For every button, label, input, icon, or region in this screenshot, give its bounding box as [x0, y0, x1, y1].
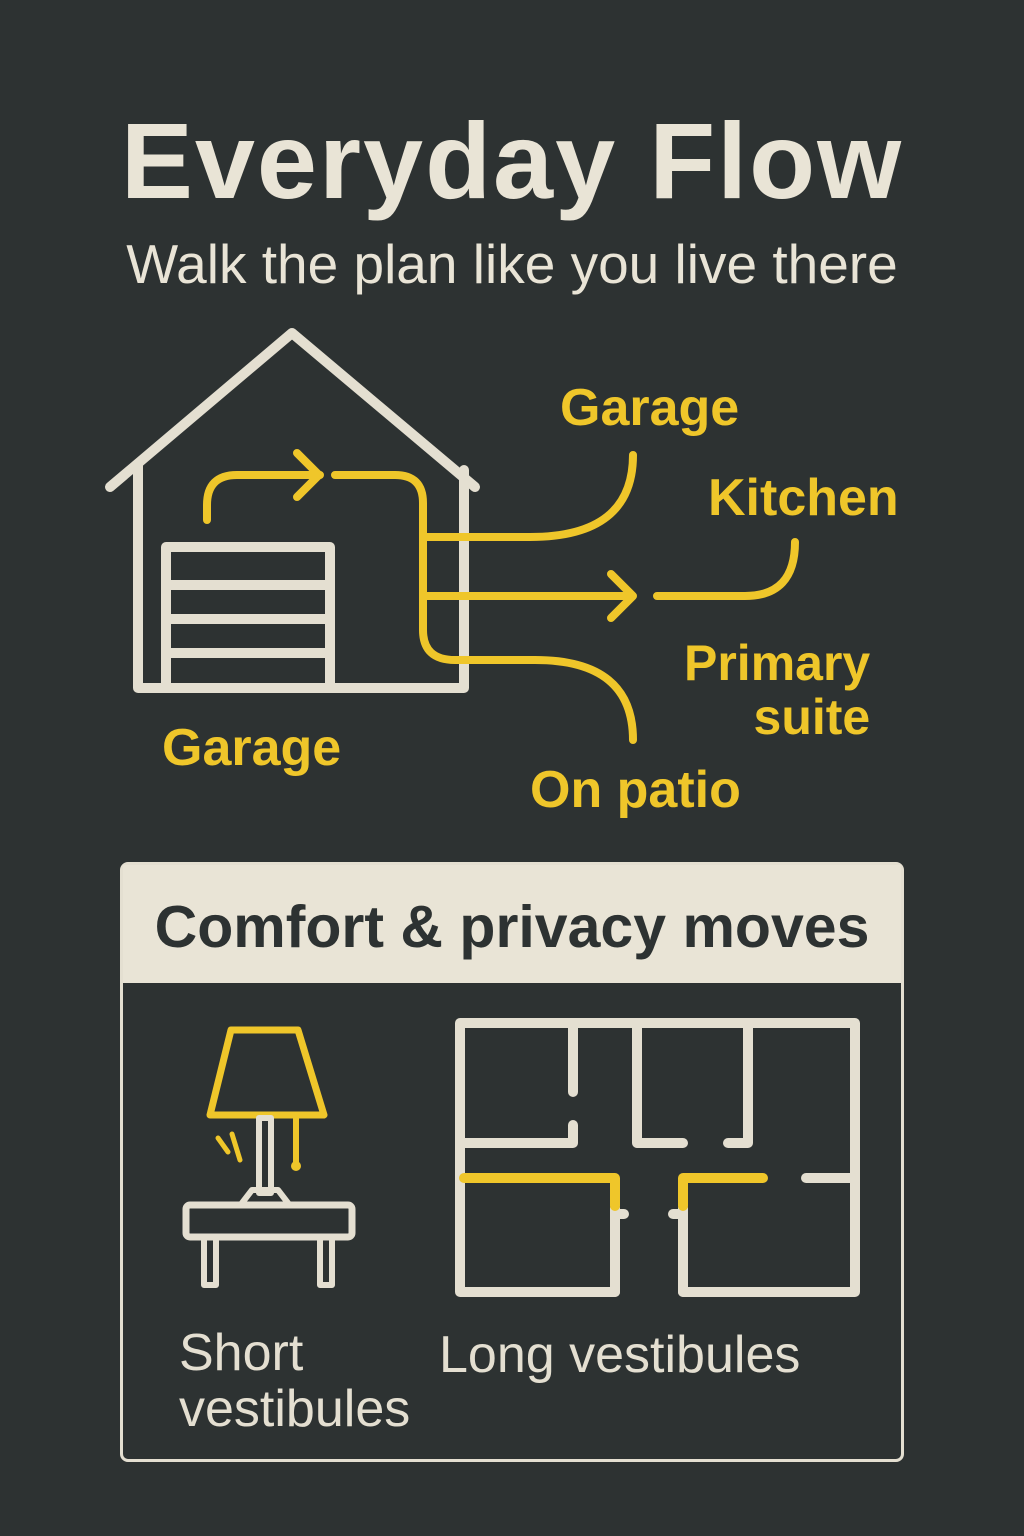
panel heading: Comfort & privacy moves	[155, 894, 869, 960]
title: Everyday Flow	[121, 100, 903, 221]
label: Short vestibules	[179, 1324, 410, 1438]
panel heading	[123, 865, 901, 983]
label: Short vestibules: Short	[179, 1324, 303, 1382]
label: Garage bottom: Garage	[162, 719, 341, 777]
icon: floor plan	[460, 1023, 855, 1292]
label: Primary suite	[684, 635, 870, 745]
icon: lamp on table	[186, 1030, 352, 1285]
label: Primary suite: suite	[754, 689, 870, 745]
label: Long vestibules: Long vestibules	[439, 1326, 800, 1384]
subtitle: Walk the plan like you live there	[126, 233, 898, 295]
label: Garage top: Garage	[560, 379, 739, 437]
label: Kitchen: Kitchen	[708, 469, 899, 527]
panel: comfort & privacy	[120, 862, 904, 1462]
icon: house with garage	[110, 333, 475, 688]
label: Primary suite: Primary	[684, 635, 870, 691]
label: On patio: On patio	[530, 761, 741, 819]
label: Short vestibules: vestibules	[179, 1380, 410, 1438]
arrows: flow paths	[207, 453, 795, 740]
